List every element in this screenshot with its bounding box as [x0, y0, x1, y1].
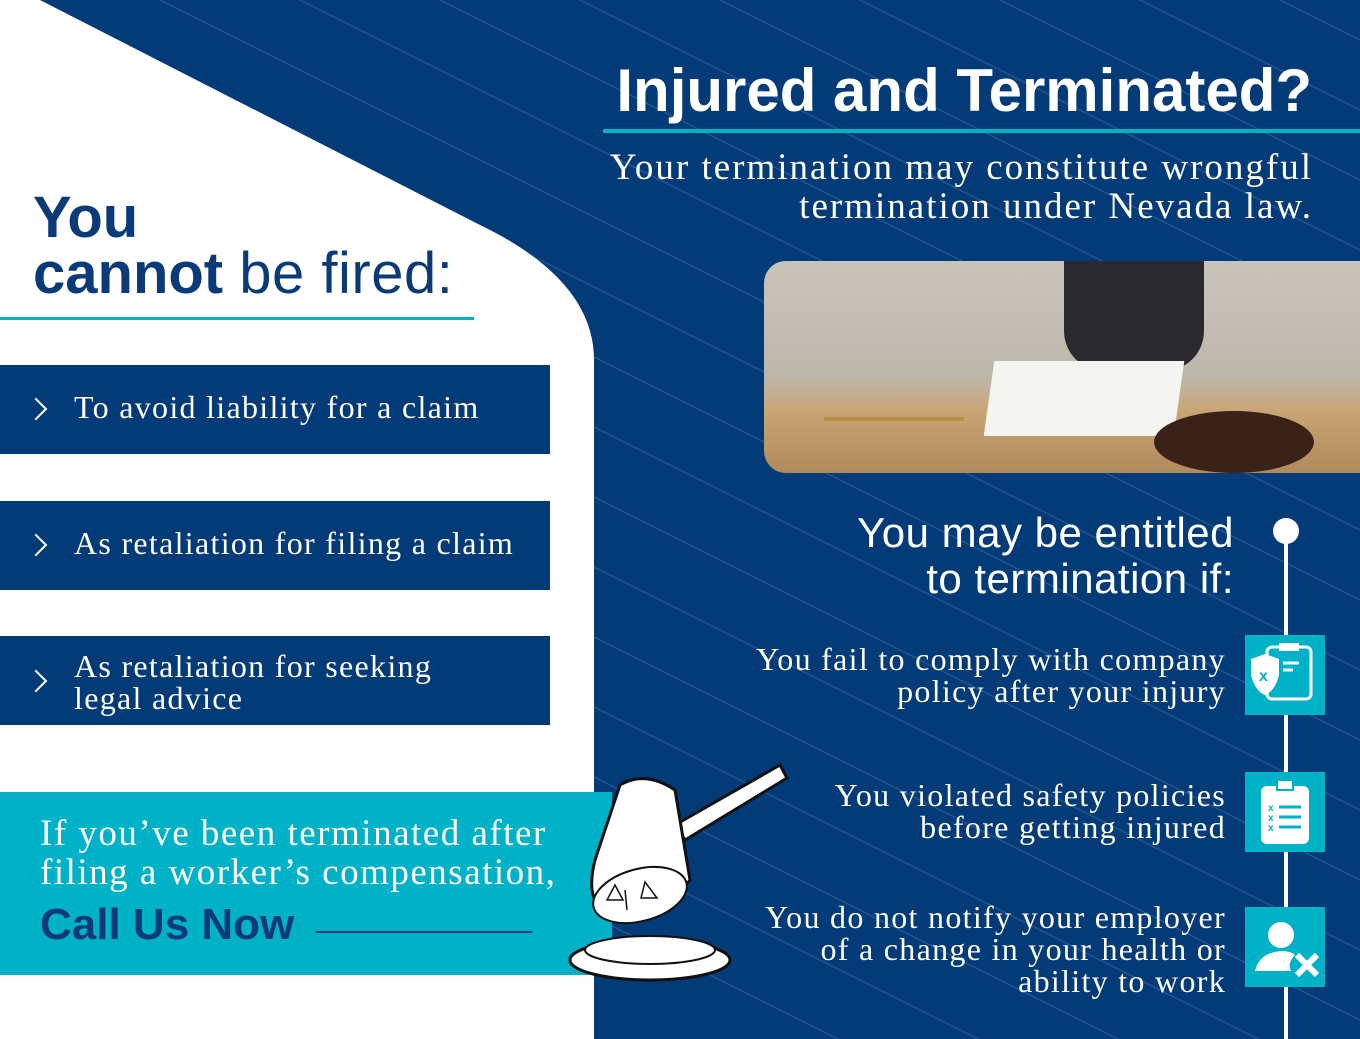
- item 3: [765, 899, 1226, 999]
- call to action band: If you’ve been terminated after: [40, 813, 547, 854]
- bar 1: To avoid liability for a claim: [74, 389, 480, 425]
- item 3: ability to work: [1018, 963, 1226, 999]
- call to action band: Call Us Now: [40, 900, 294, 949]
- item 3: You do not notify your employer: [765, 899, 1226, 935]
- item 2: You violated safety policies: [835, 777, 1226, 813]
- bar 2: As retaliation for filing a claim: [74, 525, 514, 561]
- item 2: before getting injured: [920, 809, 1226, 845]
- icon: policy shield: [1245, 635, 1325, 715]
- title: Injured and Terminated?: [616, 57, 1312, 124]
- timeline: [1284, 530, 1288, 1039]
- heading: entitled: You may be entitled: [857, 509, 1234, 556]
- subtitle: termination under Nevada law.: [799, 186, 1313, 227]
- photo: [764, 261, 1360, 473]
- subtitle: Your termination may constitute wrongful: [610, 147, 1313, 188]
- icon: clipboard: x: [1268, 803, 1274, 814]
- item 3: of a change in your health or: [820, 931, 1226, 967]
- call to action band: [0, 792, 612, 975]
- heading: entitled: to termination if:: [926, 555, 1234, 602]
- icon: person x: [1245, 907, 1325, 987]
- bar 3: As retaliation for seeking: [74, 648, 432, 684]
- item 1: policy after your injury: [897, 673, 1226, 709]
- call to action band: filing a worker’s compensation,: [40, 852, 556, 893]
- bar 2: [0, 501, 550, 590]
- illustration: gavel: [568, 763, 789, 982]
- icon: policy shield: x: [1259, 668, 1268, 685]
- icon: clipboard: [1245, 772, 1325, 852]
- item 2: [834, 777, 1226, 845]
- icon: clipboard: x: [1268, 823, 1274, 834]
- heading: You cannot be fired: [33, 185, 453, 306]
- white left panel: [0, 0, 594, 1039]
- item 1: You fail to comply with company: [756, 641, 1226, 677]
- heading: You cannot be fired: cannot be fired:: [33, 241, 453, 306]
- bar 3: legal advice: [74, 680, 243, 716]
- icon: clipboard: x: [1268, 813, 1274, 824]
- heading: You cannot be fired: You: [33, 185, 138, 250]
- subtitle: [610, 147, 1313, 227]
- bar 1: [0, 365, 550, 454]
- heading: entitled: [857, 509, 1234, 602]
- bar 3: [0, 636, 550, 725]
- item 1: [756, 641, 1226, 709]
